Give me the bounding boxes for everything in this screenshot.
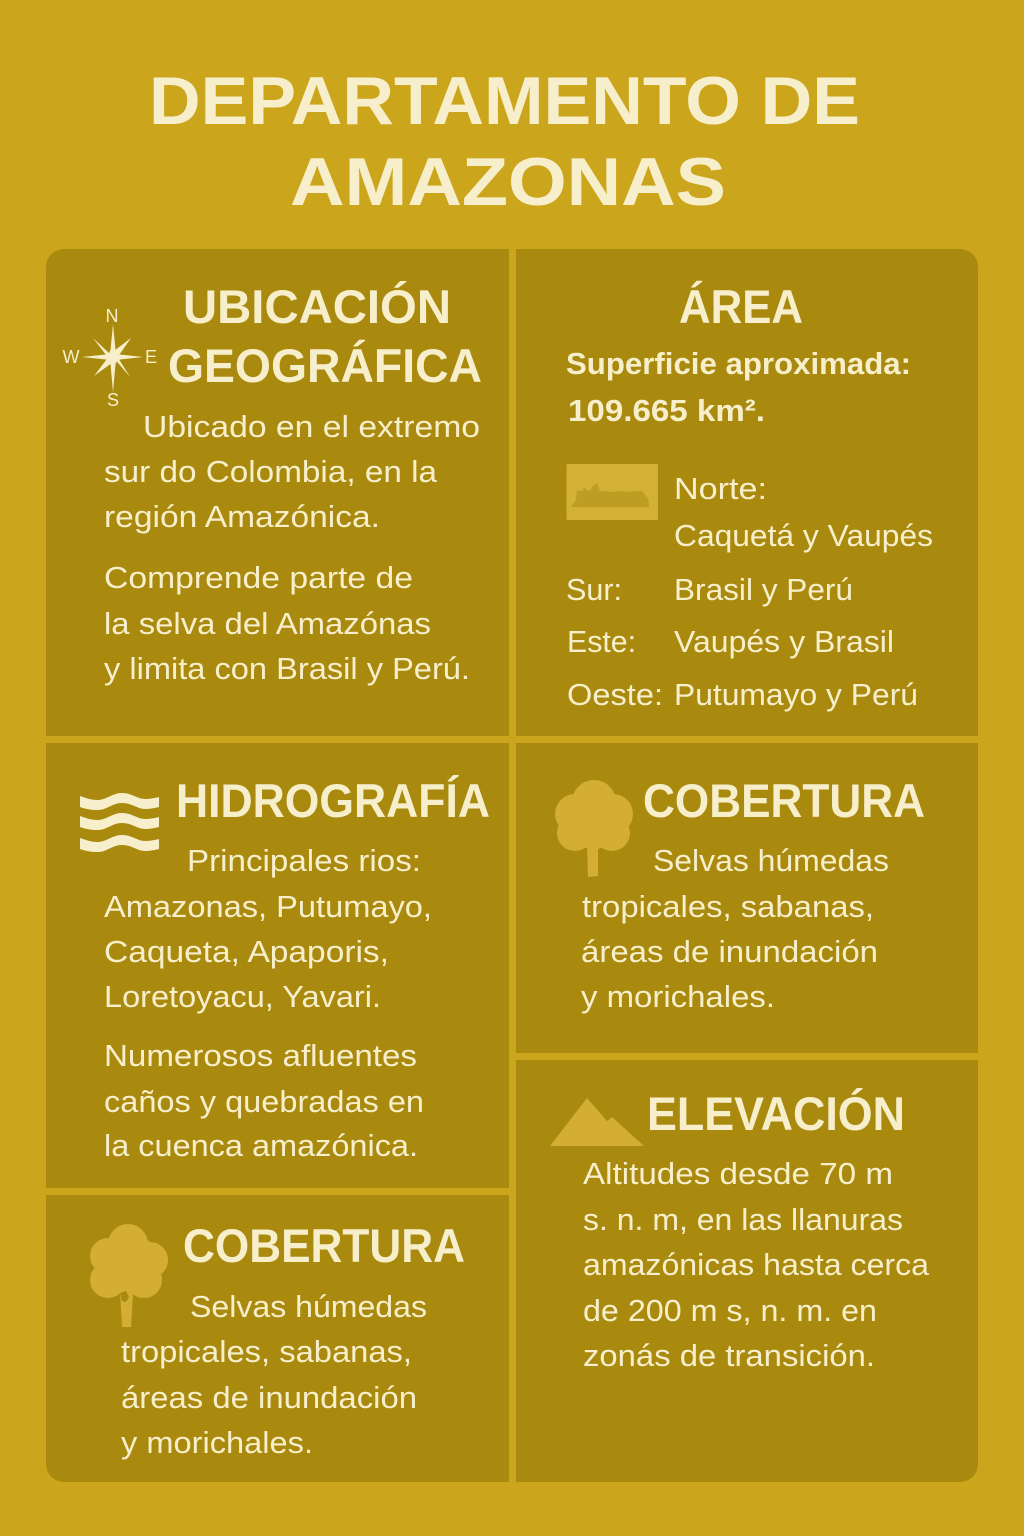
title: DEPARTAMENTO DE (149, 63, 860, 139)
text: cobertura: tropicales, sabanas, (582, 889, 874, 924)
panel: ubicación geográfica (46, 249, 509, 736)
text: elevación: de 200 m s, n. m. en (583, 1293, 877, 1328)
text: ríos: Caqueta, Apaporis, (104, 934, 389, 969)
text: ubicación description: y limita con Brasil y Perú. (104, 651, 470, 686)
icon: tree (555, 780, 633, 877)
panel: hidrografía (46, 743, 509, 1188)
icon: compass rose: N (106, 306, 118, 326)
text: límites: Caquetá y Vaupés (674, 518, 933, 553)
text: ubicación description: Ubicado en el extremo (143, 409, 480, 444)
text: ubicación description (104, 409, 480, 686)
text: límites: Vaupés y Brasil (674, 624, 894, 659)
text: ríos: la cuenca amazónica. (104, 1128, 418, 1163)
icon: mountain (550, 1098, 644, 1146)
text: cobertura (581, 843, 889, 1014)
text: cobertura: áreas de inundación (121, 1380, 417, 1415)
icon: tree (90, 1224, 168, 1327)
text: elevación: zonás de transición. (583, 1338, 875, 1373)
text: cobertura: tropicales, sabanas, (121, 1334, 412, 1369)
text: ríos: Principales rios: (187, 843, 421, 878)
text: ríos (104, 843, 432, 1163)
heading: área: ÁREA (679, 280, 803, 333)
heading: elevación: ELEVACIÓN (647, 1087, 905, 1140)
text: ubicación description: la selva del Amazónas (104, 606, 431, 641)
text: ríos: caños y quebradas en (104, 1084, 424, 1119)
text: ríos: Amazonas, Putumayo, (104, 889, 432, 924)
icon: map silhouette (566, 464, 658, 520)
text: elevación: Altitudes desde 70 m (583, 1156, 893, 1191)
heading: ubicación geográfica: GEOGRÁFICA (168, 339, 482, 392)
icon: compass rose: E (145, 347, 157, 367)
title: AMAZONAS (290, 144, 726, 220)
text: límites: Sur: (566, 572, 622, 607)
text: superficie: 109.665 km². (568, 393, 765, 428)
text: cobertura: Selvas húmedas (190, 1289, 427, 1324)
text: ríos: Numerosos afluentes (104, 1038, 417, 1073)
text: límites: Este: (567, 624, 636, 659)
text: elevación (583, 1156, 930, 1373)
text: ubicación description: Comprende parte de (104, 560, 413, 595)
text: límites: Oeste: (567, 677, 663, 712)
panel: área (516, 249, 978, 736)
panel: elevación (516, 1060, 978, 1482)
panel: cobertura izquierda (46, 1195, 509, 1482)
text: superficie: Superficie aproximada: (566, 346, 911, 381)
text: ríos: Loretoyacu, Yavari. (104, 979, 381, 1014)
text: superficie (566, 346, 911, 428)
text: límites: Brasil y Perú (674, 572, 853, 607)
heading: cobertura: COBERTURA (183, 1219, 465, 1272)
icon: compass rose (62, 306, 157, 410)
heading: cobertura: COBERTURA (643, 774, 925, 827)
title (149, 63, 860, 220)
text: cobertura: y morichales. (581, 979, 775, 1014)
text: elevación: s. n. m, en las llanuras (583, 1202, 903, 1237)
heading: hidrografía: HIDROGRAFÍA (176, 774, 490, 827)
text: elevación: amazónicas hasta cerca (583, 1247, 930, 1282)
heading: ubicación geográfica (168, 280, 482, 392)
panel: cobertura derecha (516, 743, 978, 1053)
text: límites: Norte: (674, 471, 767, 506)
icon: compass rose: S (107, 390, 119, 410)
icon: water waves (80, 793, 159, 852)
text: cobertura: y morichales. (121, 1425, 313, 1460)
icon: compass rose: W (62, 347, 80, 367)
text: límites: Putumayo y Perú (674, 677, 918, 712)
text: cobertura (121, 1289, 427, 1460)
text: cobertura: áreas de inundación (581, 934, 878, 969)
text: cobertura: Selvas húmedas (653, 843, 889, 878)
text: ubicación description: región Amazónica. (104, 499, 380, 534)
heading: ubicación geográfica: UBICACIÓN (183, 280, 451, 333)
text: límites (566, 471, 933, 712)
text: ubicación description: sur do Colombia, en la (104, 454, 438, 489)
